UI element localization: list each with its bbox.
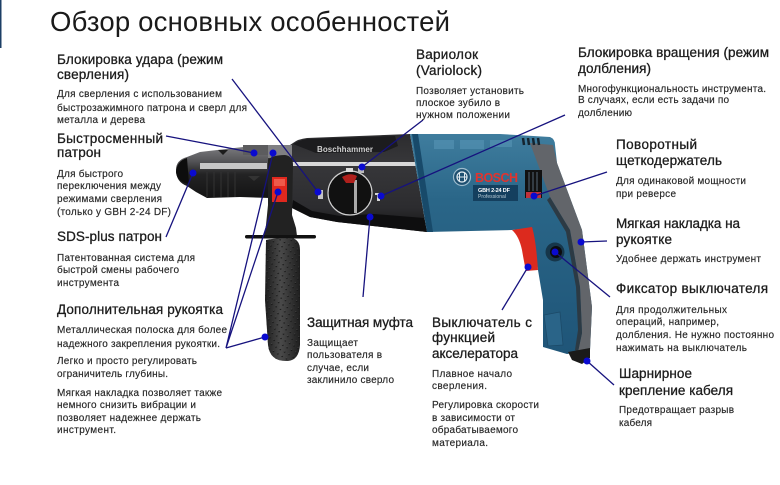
left edge bar (0, 0, 2, 48)
description: кабеля (619, 417, 652, 429)
heading: SDS-plus патрон (57, 229, 162, 244)
heading: Мягкая накладка на (616, 216, 740, 231)
description: Защищает (307, 338, 358, 349)
leader: rotation stop (378, 115, 565, 200)
hammer body (268, 134, 427, 232)
description (616, 305, 774, 354)
description: Позволяет установить (416, 86, 524, 97)
description: нужном положении (416, 110, 510, 121)
heading (57, 52, 223, 82)
title: Обзор основных особенностей (50, 6, 450, 37)
text block: switch lock (616, 281, 774, 354)
leader: brush holder (530, 172, 607, 200)
heading: сверления) (57, 67, 129, 82)
leader: trigger (502, 264, 532, 310)
side handle (245, 155, 316, 361)
heading (619, 366, 733, 398)
leader: soft grip (578, 238, 607, 246)
heading (616, 216, 740, 247)
description: Мягкая накладка позволяет также (57, 388, 222, 399)
leader: SDS-plus chuck (166, 170, 196, 237)
chuck (176, 145, 270, 198)
heading: акселератора (432, 346, 518, 361)
description: долблению (578, 107, 632, 119)
description: сверления. (432, 381, 487, 392)
heading: Фиксатор выключателя (616, 281, 768, 296)
description: Предотвращает разрыв (619, 405, 734, 416)
description: инструмента (57, 278, 119, 289)
description: Плавное начало (432, 369, 512, 380)
description: плоское зубило в (416, 97, 500, 109)
description: ограничитель глубины. (57, 368, 168, 380)
description: обрабатываемого (432, 424, 518, 436)
logo and model plate (454, 168, 518, 201)
description: случае, если (307, 363, 369, 374)
leader: Variolock (358, 120, 423, 170)
heading: рукоятке (616, 232, 672, 247)
leader: impact stop (232, 79, 322, 196)
description (432, 369, 539, 449)
description: В случаях, если есть задачи по (578, 95, 729, 106)
description: быстрой смены рабочего (57, 264, 179, 276)
description: Для быстрого (57, 168, 123, 180)
description (57, 89, 247, 126)
description (616, 176, 746, 200)
description: металла и дерева (57, 115, 145, 126)
leader: quick-change chuck (166, 136, 258, 156)
heading (57, 131, 163, 160)
description: Для одинаковой мощности (616, 176, 746, 187)
description: материала. (432, 438, 488, 449)
heading: Блокировка вращения (режим (578, 45, 769, 60)
heading: (Variolock) (416, 63, 482, 78)
heading: функцией (432, 330, 495, 345)
text block: brush holder (616, 137, 746, 200)
text block: rotation stop (578, 45, 769, 119)
description: нажимать на выключатель (616, 343, 747, 354)
heading (432, 315, 532, 361)
description: в зависимости от (432, 413, 515, 424)
description: Регулировка скорости (432, 400, 539, 411)
description: быстрозажимного патрона и сверл для (57, 102, 247, 114)
logo and model plate: GBH 2-24 DF (478, 188, 511, 194)
hammer body: Boschhammer (317, 145, 373, 154)
text block: SDS-plus chuck (57, 229, 195, 289)
selector dial (328, 168, 372, 215)
heading: Поворотный (616, 137, 697, 152)
text block: safety clutch (307, 315, 413, 386)
heading: патрон (57, 145, 101, 160)
description: надежного закрепления рукоятки. (57, 339, 220, 350)
description: заклинило сверло (307, 375, 394, 386)
description: Многофункциональность инструмента. (578, 83, 766, 95)
description: переключения между (57, 181, 161, 192)
text block: impact stop (57, 52, 247, 126)
description: пользователя в (307, 350, 382, 361)
description (57, 253, 195, 289)
heading: Выключатель с (432, 315, 532, 330)
heading: щеткодержатель (616, 153, 722, 168)
leader: safety clutch (363, 214, 374, 297)
description: операций, например, (616, 317, 719, 328)
description (578, 83, 766, 119)
text block: trigger (432, 315, 539, 449)
drill illustration (176, 134, 592, 364)
heading: крепление кабеля (619, 383, 733, 398)
heading (578, 45, 769, 76)
description: Для сверления с использованием (57, 89, 222, 100)
heading: долбления) (578, 61, 651, 76)
accelerator trigger (512, 227, 538, 271)
description (619, 405, 734, 429)
description (416, 86, 524, 121)
description: Удобнее держать инструмент (616, 253, 761, 265)
description (57, 168, 171, 218)
description: Для продолжительных (616, 305, 727, 316)
text block: quick-change chuck (57, 131, 171, 218)
text block: Variolock (416, 47, 524, 121)
description: немного снизить вибрации и (57, 399, 196, 411)
heading: Защитная муфта (307, 315, 413, 330)
locking button (546, 242, 564, 262)
leader: switch lock (552, 248, 610, 297)
vents (523, 138, 542, 198)
heading: Дополнительная рукоятка (57, 302, 223, 317)
text block: cable joint (619, 366, 734, 429)
heading: Блокировка удара (режим (57, 52, 223, 67)
description: долбления. Не нужно постоянно (616, 329, 774, 341)
leaders: auxiliary handle (226, 150, 282, 348)
heading: Вариолок (416, 47, 478, 62)
text block: soft grip (616, 216, 761, 265)
text block: auxiliary handle (57, 302, 227, 436)
description: Легко и просто регулировать (57, 356, 197, 367)
description (307, 338, 394, 386)
blue housing (410, 134, 592, 354)
description: (только у GBH 2-24 DF) (57, 207, 171, 218)
description: позволяет надежнее держать (57, 413, 201, 424)
description: Металлическая полоска для более (57, 324, 227, 336)
leader lines and dots (166, 79, 614, 385)
description: режимами сверления (57, 194, 162, 205)
cable joint (568, 348, 590, 364)
heading: Быстросменный (57, 131, 163, 146)
heading (416, 47, 482, 78)
logo and model plate: BOSCH (475, 171, 518, 185)
description: Патентованная система для (57, 253, 195, 264)
heading: Шарнирное (619, 366, 692, 381)
description: при реверсе (616, 189, 676, 200)
description (57, 324, 227, 436)
description: инструмент. (57, 425, 116, 436)
leader: cable joint (584, 358, 614, 385)
logo and model plate: Professional (478, 194, 506, 200)
heading (616, 137, 722, 168)
